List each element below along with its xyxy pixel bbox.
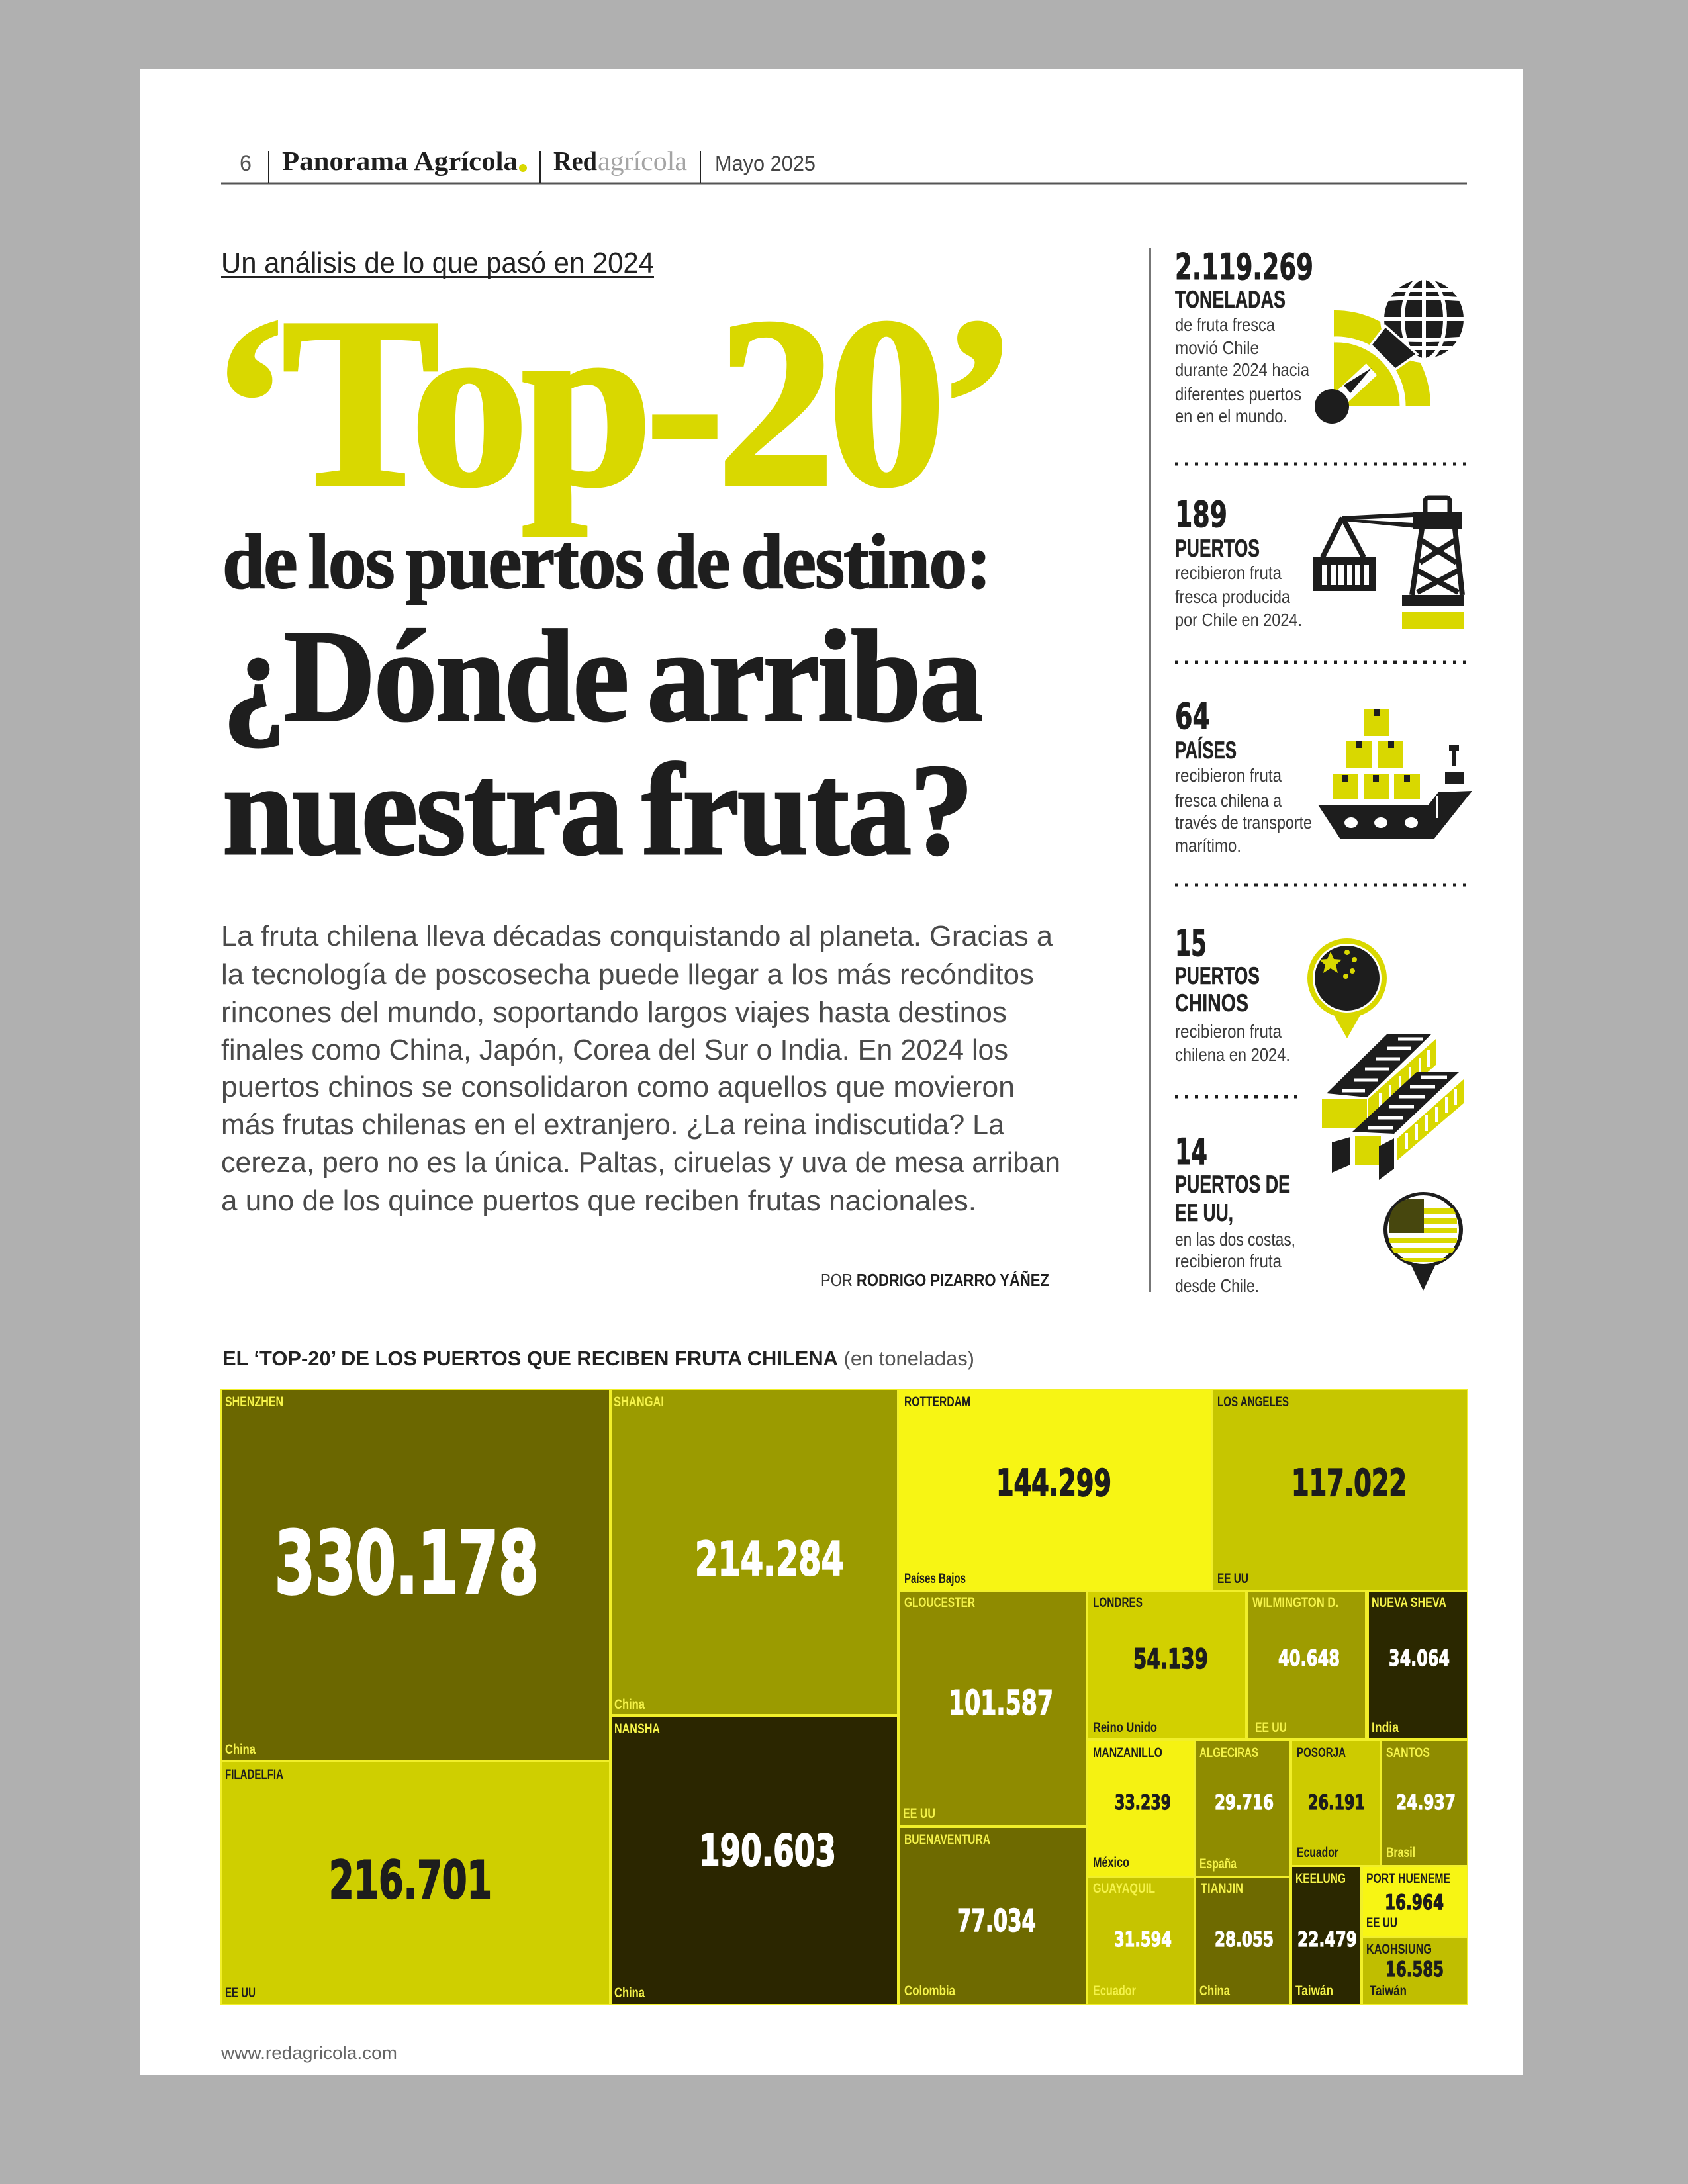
icon: port crane [1313,498,1464,629]
icon: cargo ship [1318,709,1472,839]
cell: Kaohsiung [1363,1938,1467,2004]
stat: puertos chinos: CHINOS [1175,989,1248,1017]
icon: USA map pin [1383,1192,1464,1291]
header bar: 6 [240,151,252,176]
cell: Londres: Reino Unido [1093,1720,1157,1735]
stat: puertos chinos: 15 [1175,923,1207,964]
cell: Los Angeles: EE UU [1217,1571,1248,1586]
cell: Wilmington D.: 40.648 [1278,1645,1340,1672]
cell: Rotterdam: Países Bajos [904,1571,966,1586]
stat: países: través de transporte [1175,812,1312,833]
cell: Wilmington D.: WILMINGTON D. [1252,1595,1338,1610]
kicker: Un análisis de lo que pasó en 2024 [221,247,654,279]
treemap chart [220,1389,1468,2005]
cell: Shangai: 214.284 [695,1532,844,1586]
cell: Nueva Sheva: India [1372,1720,1399,1735]
stat: puertos: por Chile en 2024. [1175,610,1302,630]
cell: Posorja: POSORJA [1297,1745,1346,1760]
cell: Santos [1382,1741,1467,1865]
cell: Nueva Sheva: 34.064 [1389,1645,1450,1672]
cell: Los Angeles: 117.022 [1291,1462,1407,1505]
stat: puertos chinos [1175,923,1290,1065]
cell: Tianjin: 28.055 [1215,1928,1274,1952]
intro text block: a uno de los quince puertos que reciben frutas nacionales. [221,1185,976,1217]
stat: países: 64 [1175,696,1210,737]
cell: Port Hueneme: EE UU [1366,1915,1397,1931]
footer url: www.redagricola.com [220,2043,397,2063]
cell: Posorja: Ecuador [1297,1845,1338,1860]
title: Top-20: ‘Top-20’ [211,269,1010,537]
stat: puertos [1175,494,1302,630]
cell: Shenzhen [222,1390,609,1760]
cell: Santos: 24.937 [1396,1791,1456,1815]
cell: Rotterdam: ROTTERDAM [904,1394,970,1410]
stat: toneladas: TONELADAS [1175,286,1286,313]
cell: Shangai: China [614,1697,645,1712]
cell: Gloucester: EE UU [903,1806,935,1821]
cell: Buenaventura: Colombia [904,1983,955,1999]
cell: Posorja [1292,1741,1380,1865]
byline: POR RODRIGO PIZARRO YÁÑEZ [821,1270,1049,1290]
stat: países: PAÍSES [1175,737,1237,764]
cell: Keelung: 22.479 [1297,1928,1357,1952]
cell: Londres: 54.139 [1133,1643,1208,1675]
stat: puertos EE UU [1175,1131,1295,1296]
cell: Rotterdam [899,1390,1211,1590]
divider dots [1175,660,1466,664]
cell: Kaohsiung: KAOHSIUNG [1366,1942,1432,1957]
stat: puertos EE UU: PUERTOS DE [1175,1171,1290,1198]
stat: puertos: PUERTOS [1175,535,1260,562]
cell: Algeciras [1196,1741,1289,1876]
divider dots [1175,883,1466,887]
cell: Los Angeles [1213,1390,1467,1590]
stat: puertos EE UU: EE UU, [1175,1199,1233,1226]
cell: Manzanillo [1088,1741,1194,1876]
stat: toneladas: movió Chile [1175,338,1259,358]
intro text block: rincones del mundo, soportando largos viajes hasta destinos [221,996,1007,1028]
icon: China map pin [1307,938,1387,1038]
divider dots [1175,1095,1297,1099]
cell: Rotterdam: 144.299 [996,1462,1111,1505]
stat: puertos: fresca producida [1175,586,1290,607]
cell: Wilmington D. [1248,1592,1365,1738]
icon: globe and satellite dish [1315,275,1468,424]
cell: Posorja: 26.191 [1308,1791,1365,1815]
cell: Manzanillo: México [1093,1855,1129,1870]
stat: puertos chinos: chilena en 2024. [1175,1044,1290,1065]
cell: Nueva Sheva: NUEVA SHEVA [1372,1595,1446,1610]
sidebar divider [1149,248,1151,1292]
stat: países: marítimo. [1175,835,1241,856]
cell: Filadelfia: EE UU [225,1985,256,2001]
cell: Guayaquil [1088,1878,1194,2004]
cell: Nansha: 190.603 [699,1825,836,1876]
cell: Nueva Sheva [1369,1592,1467,1738]
cell: Kaohsiung: 16.585 [1385,1958,1444,1981]
stat: países: recibieron fruta [1175,765,1282,786]
cell: Londres [1088,1592,1245,1738]
cell: Gloucester: GLOUCESTER [904,1595,975,1610]
cell: Santos: SANTOS [1386,1745,1430,1760]
cell: Tianjin: TIANJIN [1201,1881,1243,1896]
cell: Guayaquil: Ecuador [1093,1983,1136,1999]
header bar: agrícola [598,146,687,176]
intro text block: La fruta chilena lleva décadas conquistando al planeta. Gracias a [221,920,1053,952]
cell: Gloucester: 101.587 [949,1684,1053,1723]
cell: Nansha: China [614,1985,645,2001]
stat: toneladas: en en el mundo. [1175,406,1288,426]
cell: Shenzhen: 330.178 [275,1513,539,1614]
cell: Guayaquil: GUAYAQUIL [1093,1881,1155,1896]
intro text block: cereza, pero no es la única. Paltas, ciruelas y uva de mesa arriban [221,1146,1060,1179]
cell: Algeciras: ALGECIRAS [1199,1745,1258,1760]
intro text block [221,920,1060,1217]
cell: Wilmington D.: EE UU [1255,1720,1287,1735]
cell: Manzanillo: 33.239 [1115,1791,1171,1815]
cell: Buenaventura [900,1828,1086,2004]
cell: Filadelfia: 216.701 [329,1851,492,1911]
cell: Tianjin [1196,1878,1289,2004]
cell: Los Angeles: LOS ANGELES [1217,1394,1289,1410]
cell: Santos: Brasil [1386,1845,1415,1860]
stat: toneladas: de fruta fresca [1175,314,1275,335]
header bar: Red [553,146,597,176]
cell: Tianjin: China [1199,1983,1230,1999]
stat: toneladas: diferentes puertos [1175,384,1301,404]
cell: Shenzhen: China [225,1742,256,1757]
cell: Kaohsiung: Taiwán [1370,1983,1407,1999]
intro text block: la tecnología de poscosecha puede llegar a los más recónditos [221,958,1034,991]
title line 4: nuestra fruta? [222,737,972,882]
cell: Port Hueneme: PORT HUENEME [1366,1871,1450,1886]
stat: toneladas: 2.119.269 [1175,246,1313,288]
cell: Port Hueneme [1363,1867,1467,1936]
header bar: Panorama Agrícola [282,146,518,176]
header bar: Mayo 2025 [715,152,816,175]
cell: Gloucester [900,1592,1086,1825]
stat: puertos chinos: recibieron fruta [1175,1021,1282,1042]
stat: puertos chinos: PUERTOS [1175,962,1260,989]
intro text block: más frutas chilenas en el extranjero. ¿La reina indiscutida? La [221,1109,1005,1141]
panel: white page [140,69,1523,2075]
stat: puertos EE UU: en las dos costas, [1175,1229,1295,1250]
cell: Londres: LONDRES [1093,1595,1143,1610]
title line 3: ¿Dónde arriba [222,604,981,749]
stat: toneladas: durante 2024 hacia [1175,359,1309,380]
divider dots [1175,462,1466,466]
stat: puertos EE UU: desde Chile. [1175,1275,1259,1296]
cell: Shenzhen: SHENZHEN [225,1394,283,1410]
stat: países: fresca chilena a [1175,790,1282,811]
cell: Nansha: NANSHA [614,1721,660,1737]
cell: Port Hueneme: 16.964 [1385,1891,1444,1915]
cell: Algeciras: 29.716 [1215,1791,1274,1815]
cell: Filadelfia: FILADELFIA [225,1767,283,1782]
intro text block: puertos chinos se consolidaron como aquellos que movieron [221,1071,1015,1103]
stat: puertos EE UU: 14 [1175,1131,1207,1173]
cell: Shangai: SHANGAI [614,1394,664,1410]
stat: puertos EE UU: recibieron fruta [1175,1251,1282,1271]
icon: shipping containers [1322,1034,1464,1180]
cell: Algeciras: España [1199,1856,1237,1872]
cell: Nansha [612,1717,897,2004]
stat: puertos: recibieron fruta [1175,563,1282,583]
cell: Keelung [1292,1867,1360,2004]
cell: Filadelfia [222,1762,609,2004]
cell: Keelung: KEELUNG [1295,1871,1346,1886]
cell: Manzanillo: MANZANILLO [1093,1745,1162,1760]
cell: Guayaquil: 31.594 [1114,1928,1172,1952]
cell: Buenaventura: 77.034 [957,1903,1036,1938]
chart title: EL ‘TOP-20’ DE LOS PUERTOS QUE RECIBEN FRUTA CHILENA (en toneladas) [222,1347,974,1370]
cell: Keelung: Taiwán [1295,1983,1333,1999]
cell: Buenaventura: BUENAVENTURA [904,1832,990,1847]
stat: toneladas [1175,246,1313,426]
stat: puertos: 189 [1175,494,1227,535]
intro text block: finales como China, Japón, Corea del Sur o India. En 2024 los [221,1034,1008,1066]
cell: Shangai [612,1390,897,1714]
header bar [221,146,1467,184]
stat: países [1175,696,1312,856]
title line 2: de los puertos de destino: [222,518,990,605]
